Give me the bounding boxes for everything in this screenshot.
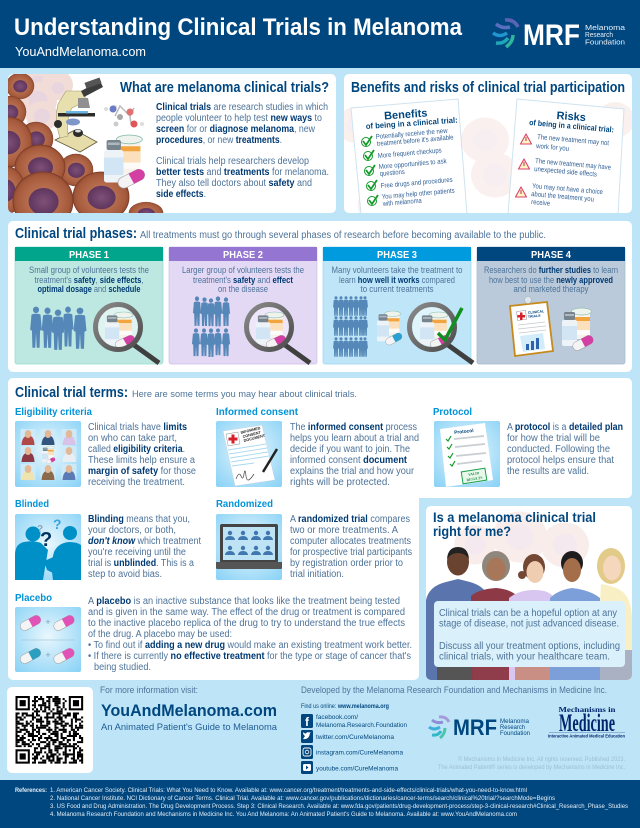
term: blinded: trial is unblinded. This is a [88,558,194,569]
magnifier over medicine [246,304,310,363]
illustration: melanoma cells [8,74,164,213]
body text [156,102,329,200]
term: informed consent: helps you learn about a trial and [290,433,419,444]
icon: twitter [301,730,313,743]
card: benefits: More opportunities to ask [379,158,447,171]
medicine with blue pill [377,311,403,346]
icons: warning triangles [516,134,532,197]
footer: developed by and social links: facebook.com/ [316,714,358,721]
card: risks: Risks [556,110,586,124]
card: risks: work for you [535,143,569,153]
illustration: microscope [54,77,103,152]
icon: pill combinations: + [45,650,51,660]
heading: Clinical trial terms: [15,385,128,401]
card: phase 1: optimal dosage and schedule [38,284,140,294]
card: benefits: of being in a clinical trial: [366,116,458,131]
copyright: The Animated Patient® series is developed by Mechanisms in Medicine Inc. [438,764,625,771]
logo: MRF: Foundation [585,40,625,46]
callout: Clinical trials can be a hopeful option at any [439,608,617,619]
term: protocol: A protocol is a detailed plan [507,422,623,433]
panel: benefits and risks [344,74,632,213]
term: informed consent: informed consent document [290,455,408,466]
term: informed consent [216,406,419,488]
body text: people volunteer to help test new ways to [156,113,322,124]
card: risks: of being in a clinical trial: [529,118,614,134]
panel: clinical trial phases [8,221,632,372]
term: eligibility criteria: These limits help ensure a [88,455,195,466]
card: phase 2: on the disease [218,284,268,294]
footer: website promo: For more information visit: [100,685,198,696]
references bar [0,780,640,828]
heading: What are melanoma clinical trials? [120,79,329,96]
callout: Discuss all your treatment options, including [439,641,620,652]
term: eligibility criteria: called eligibility criteria. [88,444,185,455]
logo: Mechanisms in Medicine: Interactive Animated Medical Education [548,734,625,738]
term: randomized: computer allocates treatments [290,536,411,547]
body text: Clinical trials help researchers develop [156,156,309,167]
logo: MRF footer: Research [500,725,525,731]
panel: is a melanoma clinical trial right for me [426,506,632,680]
clinical trials clipboard: CLINICAL [528,309,545,315]
term: placebo: A placebo is an inactive substance that looks like the treatment being tested [88,596,400,607]
icon: consent document: INFORMED [240,426,261,435]
body text: better tests and treatments for melanoma. [156,167,329,178]
body text: Clinical trials are research studies in which [156,102,328,113]
term: placebo: of the drug. A placebo may be used: [88,629,232,640]
term: informed consent: explains the trial and how your [290,466,415,477]
card: benefits [351,99,467,214]
term: informed consent: rights will be protected. [290,477,390,488]
footer: website promo [100,685,278,733]
logo: MRF: Research [585,32,613,39]
card: phase 4: PHASE 4 [531,249,571,261]
icon: youtube [301,761,313,774]
icon: consent document [223,425,277,486]
term: placebo: to the inactive placebo replica of the drug to try to understand the true effects [88,618,405,629]
term: informed consent: decide if you want to join. The [290,444,410,455]
icons: green checks [362,136,378,206]
term: blinded: step to avoid bias. [88,569,162,580]
term: informed consent: The informed consent process [290,422,417,433]
header banner [0,0,640,68]
footer: website promo: YouAndMelanoma.com [101,701,277,720]
icon: facebook [301,714,313,729]
term: protocol [433,406,623,487]
term: placebo [15,592,412,673]
icon: consent document: CONSENT [242,430,262,439]
references bar: 1. American Cancer Society. Clinical Trials: What You Need to Know. Available at: www.cancer.org/treatment/treatments-and-side-effects/clinical-trials/what-you-need-to-know.html [50,787,527,794]
footer: developed by and social links: youtube.com/CureMelanoma [316,766,398,772]
card: benefits: Benefits [384,108,428,123]
term: blinded: your doctors, or both, [88,525,176,536]
card: benefits: questions [380,169,405,178]
term: protocol: for how the trial will be [507,433,600,444]
logo: MRF [493,19,625,52]
card: risks: The new treatment may have [535,158,611,172]
term: eligibility criteria: on who can take part, [88,433,177,444]
term: eligibility criteria: margin of safety for those [88,466,196,477]
silhouettes: five volunteers [30,307,86,350]
term: blinded: don't know which treatment [88,536,201,547]
term: placebo: and is given in the same way. The effect of the drug or treatment is compared [88,607,405,618]
term: informed consent: Informed consent [216,406,298,418]
references bar: References: [15,787,47,794]
card: risks: You may not have a choice [532,183,603,196]
card: phase 1 [15,247,163,364]
card: phase 3: to current treatments [360,284,434,294]
illustration: medicine bottles and pill [104,135,147,190]
footer: QR code [7,687,93,773]
term: eligibility criteria: receiving the treatment. [88,477,185,488]
term: blinded: Blinding means that you, [88,514,190,525]
references bar: 3. US Food and Drug Administration. The Drug Development Process. Step 3: Clinical Research. Available at: www.fda.gov/patients/drug-development-process/step-3-clinical-research#Clinical_Research_Phase_Studies [50,803,628,810]
logo: MRF footer: Melanoma [500,719,530,725]
term: eligibility criteria: Eligibility criteria [15,406,92,418]
icon: two silhouettes with question marks: ? [53,516,62,532]
card: benefits: Free drugs and procedures [381,177,453,190]
footer: developed by and social links: Find us online: www.melanoma.org [301,703,389,710]
panel: is a melanoma clinical trial right for me: right for me? [433,524,511,539]
illustration: five diverse people [426,547,632,680]
card: risks: receive [531,199,550,208]
term: randomized: two or more treatments. A [290,525,398,536]
clinical trials clipboard: TRIALS [528,314,541,319]
term: placebo: • If there is currently no effective treatment for the type or stage of cancer that's [88,651,411,662]
clinical trials clipboard [510,296,553,356]
card: phase 4: and marketed therapy [514,284,589,294]
logo: MRF: MRF [523,19,580,52]
term: eligibility criteria [15,406,196,488]
card: benefits: More frequent checkups [378,147,442,160]
website subtitle: YouAndMelanoma.com [15,45,146,59]
icon: protocol checklist: RESULTS [466,476,483,482]
silhouettes: ten volunteers [192,296,230,357]
card: phase 2: treatment's safety and effect [193,275,293,285]
icon: protocol checklist: Protocol [454,428,474,436]
card: benefits: Potentially receive the new [376,128,449,141]
card: phase 4 [477,247,625,364]
card: phase 2 [169,247,317,364]
term: blinded [15,498,201,580]
term: placebo: Placebo [15,592,52,604]
heading: Is a melanoma clinical trial [433,510,596,525]
footer: website promo: An Animated Patient's Guide to Melanoma [101,722,278,733]
copyright [438,756,625,771]
card: phase 4: how best to use the newly approved [489,275,613,285]
references bar: 4. Melanoma Research Foundation and Mechanisms in Medicine Inc. You And Melanoma: An Animated Patient's Guide to Melanoma. Available at: www.YouAndMelanoma.com [50,811,517,818]
term: protocol: Protocol [433,406,472,418]
term: protocol: the results are valid. [507,466,589,477]
footer: developed by and social links: twitter.com/CureMelanoma [316,734,394,741]
copyright: © Mechanisms in Medicine Inc. All rights reserved. Published 2023. [458,756,625,763]
icon: protocol checklist [440,423,493,487]
intro text: All treatments must go through several phases of research before becoming available to the public. [140,230,546,241]
card: phase 1: Small group of volunteers tests the [29,265,149,275]
icon: laptop with participants [216,524,282,569]
icon: protocol checklist: VALID [468,471,480,477]
icon: instagram [301,745,313,759]
icon: facebook: f [305,715,310,729]
icon: pill combinations [19,614,76,665]
card: benefits: with melanoma [382,198,422,208]
card: phase 3: learn how well it works compared [339,275,455,285]
logo: MRF footer [429,715,530,740]
term: randomized [216,498,412,580]
callout [434,601,625,667]
card: risks [508,99,624,214]
term: randomized: for prospective trial participants [290,547,412,558]
term: blinded: Blinded [15,498,49,510]
card: risks: about the treatment you [531,191,594,203]
body text: procedures, or new treatments. [156,135,282,146]
card: phase 1: treatment's safety, side effects, [34,275,144,285]
illustration: molecule [104,105,144,128]
icon: two silhouettes with question marks: ? [37,524,43,535]
card: phase 3: Many volunteers take the treatment to [332,265,462,275]
heading: Clinical trial phases: [15,226,137,242]
term: protocol: protocol helps ensure that [507,455,614,466]
logo: Mechanisms in Medicine [548,705,625,738]
magnifier over medicine [96,304,159,363]
term: placebo: being studied. [94,662,151,673]
term: randomized: trial initiation. [290,569,344,580]
logo: MRF footer: MRF [453,715,497,740]
term: eligibility criteria: Clinical trials have limits [88,422,187,433]
footer: developed by and social links [301,685,607,774]
references bar: 2. National Cancer Institute. NCI Dictionary of Cancer Terms. Clinical Trial. Available at: www.cancer.gov/publications/dictionaries/cancer-terms/search/clinical%20trial/?searchMode=Begins [50,795,555,802]
card: phase 3: PHASE 3 [377,249,417,261]
term: placebo: • To find out if adding a new drug would make an existing treatment work better. [88,640,412,651]
card: risks: unexpected side effects [534,166,598,179]
term: protocol: conducted. Following the [507,444,610,455]
logo: MRF: Melanoma [585,25,625,32]
icon: pill combinations: + [45,617,51,627]
magnifier with green check [410,304,473,363]
callout: stage of disease, not just advanced disease. [439,618,619,630]
body text: screen for or diagnose melanoma, new [156,124,316,135]
card: phase 4: Researchers do further studies to learn [484,265,618,275]
card: phase 2: Larger group of volunteers tests the [182,265,304,275]
term: blinded: you're receiving until the [88,547,186,558]
callout: clinical trials, with your healthcare team. [439,652,610,662]
footer: developed by and social links: Melanoma.Research.Foundation [316,722,407,729]
icon: consent document: DOCUMENT [243,434,266,443]
card: phase 2: PHASE 2 [223,249,263,261]
card: phase 3 [323,247,473,364]
card: risks: The new treatment may not [537,134,609,147]
logo: Mechanisms in Medicine: Mechanisms in [558,705,616,714]
title: Understanding Clinical Trials in Melanoma [14,14,463,41]
icon: grid of portraits [20,429,76,480]
term: randomized: Randomized [216,498,273,510]
term: randomized: A randomized trial compares [290,514,410,525]
body text: side effects. [156,189,206,200]
logo: MRF footer: Foundation [500,731,530,737]
panel: what are melanoma clinical trials [8,74,336,213]
card: phase 1: PHASE 1 [69,249,109,261]
silhouettes: many volunteers [333,296,368,357]
icon: two silhouettes with question marks [15,516,81,580]
intro text: Here are some terms you may hear about clinical trials. [132,389,357,400]
term: randomized: by registration order prior to [290,558,403,569]
body text: They also tell doctors about safety and [156,178,312,189]
footer: developed by and social links: instagram.com/CureMelanoma [316,750,403,756]
card: benefits: You may help other patients [382,188,455,201]
icon: two silhouettes with question marks: ? [40,529,52,551]
medicine with pink pill [562,308,595,352]
panel: clinical trial terms [8,378,632,680]
card: benefits: treatment before it's available [377,134,454,148]
